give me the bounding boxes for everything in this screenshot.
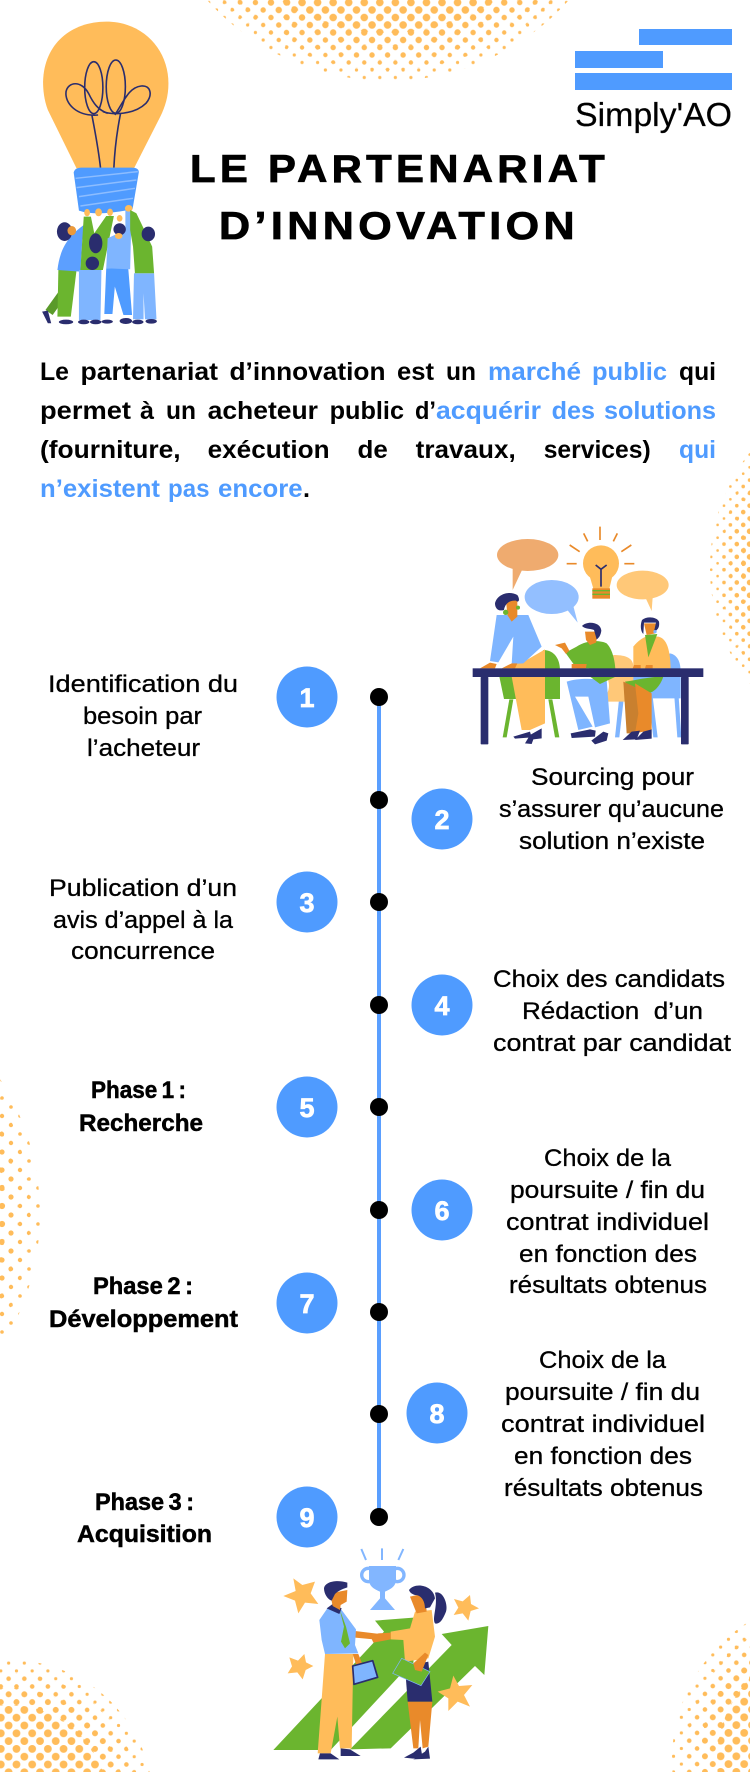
- intro paragraph: un: [166, 397, 196, 425]
- intro paragraph: qui: [679, 436, 716, 464]
- intro paragraph: acheteur: [208, 397, 318, 425]
- intro paragraph: services): [544, 436, 651, 464]
- intro paragraph: partenariat: [80, 358, 219, 386]
- icon: star top right: [454, 1595, 479, 1621]
- illustration: light bulb lifted by four people: [42, 22, 168, 324]
- icon: bulb filament: [66, 60, 150, 168]
- man shaking hands: [318, 1581, 381, 1759]
- icon: star bottom left: [288, 1654, 313, 1679]
- intro paragraph: de: [358, 436, 388, 464]
- step 9: [77, 1486, 338, 1548]
- step 1: besoin par: [83, 703, 202, 730]
- step 8: 8: [429, 1399, 445, 1429]
- intro paragraph: solutions: [604, 397, 716, 425]
- table: [473, 668, 703, 744]
- illustration: handshake, trophy and growth arrows: [273, 1548, 488, 1759]
- woman shaking hands: [371, 1585, 447, 1759]
- step 9: 9: [299, 1503, 315, 1533]
- arrow: left green growth arrow: [273, 1617, 417, 1750]
- step 5: Recherche: [79, 1110, 203, 1137]
- person 3: [104, 205, 133, 315]
- intro paragraph: Le: [40, 358, 69, 386]
- step 6: Choix de la: [544, 1145, 672, 1172]
- step 1: l’acheteur: [87, 735, 200, 762]
- intro paragraph: d’innovation: [230, 358, 386, 386]
- step 3: 3: [299, 888, 315, 918]
- timeline line: [377, 697, 381, 1517]
- intro paragraph: d’: [415, 397, 436, 425]
- step 4: contrat par candidat: [493, 1030, 731, 1057]
- intro paragraph: marché: [488, 358, 581, 386]
- logo: Simply'AO: [575, 29, 732, 133]
- step 8: poursuite / fin du: [505, 1379, 700, 1406]
- woman standing at left: [480, 593, 545, 744]
- step 8: [406, 1347, 705, 1502]
- step 5: [79, 1076, 338, 1138]
- intro paragraph: qui: [679, 358, 716, 386]
- chair: blue: [615, 653, 681, 737]
- step 5: Phase 1 :: [91, 1077, 186, 1104]
- chair: green: [499, 650, 560, 737]
- intro paragraph: n’existent: [40, 475, 161, 503]
- step 8: Choix de la: [539, 1347, 667, 1374]
- person 4: [130, 210, 156, 319]
- chair: cushion: [605, 655, 633, 702]
- person 1: [45, 222, 85, 317]
- step 3: [49, 872, 338, 965]
- step 9: Phase 3 :: [95, 1489, 194, 1516]
- step 1: [48, 666, 338, 762]
- step 2: [412, 764, 724, 855]
- step 6: 6: [434, 1196, 450, 1226]
- step 6: résultats obtenus: [509, 1272, 707, 1299]
- intro paragraph: public: [330, 397, 404, 425]
- step 8: résultats obtenus: [504, 1475, 703, 1502]
- intro paragraph: public: [592, 358, 667, 386]
- icon: star top left: [283, 1578, 318, 1613]
- icon: idea light bulb: [567, 527, 634, 599]
- step 7: Développement: [49, 1306, 238, 1333]
- man seated in green: [555, 623, 615, 744]
- step 1: Identification du: [48, 671, 238, 698]
- step 7: Phase 2 :: [93, 1273, 193, 1300]
- arrow: right green growth arrow: [350, 1626, 488, 1749]
- step 3: concurrence: [71, 938, 215, 965]
- icon: star bottom right: [438, 1676, 472, 1711]
- illustration: meeting around a table with speech bubbles: [473, 527, 703, 744]
- step 5: 5: [299, 1093, 315, 1123]
- step 2: solution n’existe: [519, 828, 705, 855]
- speech bubble: orange: [497, 539, 558, 590]
- step 6: poursuite / fin du: [510, 1177, 705, 1204]
- intro paragraph: [40, 358, 716, 503]
- step 4: [412, 966, 731, 1057]
- icon: bulb base: [74, 168, 139, 213]
- step 2: s’assurer qu’aucune: [499, 796, 724, 823]
- intro paragraph: à: [140, 397, 154, 425]
- step 7: 7: [299, 1289, 315, 1319]
- intro paragraph: travaux,: [416, 436, 516, 464]
- step 8: contrat individuel: [501, 1411, 705, 1438]
- step 4: Rédaction d’un: [522, 998, 703, 1025]
- intro paragraph: exécution: [208, 436, 330, 464]
- intro paragraph: un: [446, 358, 476, 386]
- icon: light bulb glass: [43, 22, 168, 168]
- intro paragraph: des: [552, 397, 595, 425]
- step 4: Choix des candidats: [493, 966, 725, 993]
- speech bubble: light orange: [617, 571, 669, 611]
- step 6: en fonction des: [519, 1241, 697, 1268]
- step 2: 2: [434, 805, 450, 835]
- step 2: Sourcing pour: [531, 764, 694, 791]
- people's shoes: [42, 311, 157, 324]
- step 6: contrat individuel: [506, 1209, 709, 1236]
- step 1: 1: [299, 683, 315, 713]
- intro paragraph: est: [397, 358, 435, 386]
- intro paragraph: permet: [40, 397, 132, 425]
- step 7: [49, 1272, 338, 1334]
- intro paragraph: .: [303, 475, 310, 503]
- intro paragraph: acquérir: [436, 397, 541, 425]
- speech bubble: blue: [525, 580, 579, 623]
- title: D’INNOVATION: [219, 205, 579, 248]
- timeline dots: [370, 688, 388, 1526]
- step 8: en fonction des: [514, 1443, 692, 1470]
- step 3: Publication d’un: [49, 875, 237, 902]
- icon: trophy: [361, 1548, 404, 1610]
- woman seated at right: [623, 617, 671, 740]
- intro paragraph: pas: [168, 475, 210, 503]
- intro paragraph: (fourniture,: [40, 436, 181, 464]
- title: [190, 148, 609, 248]
- step 3: avis d’appel à la: [53, 907, 234, 934]
- step 6: [412, 1145, 709, 1299]
- logo: Simply'AO: Simply'AO: [575, 96, 732, 133]
- step 9: Acquisition: [77, 1521, 212, 1548]
- intro paragraph: encore: [218, 475, 303, 503]
- step 4: 4: [434, 991, 450, 1021]
- title: LE PARTENARIAT: [190, 148, 609, 191]
- person 2: [79, 208, 114, 320]
